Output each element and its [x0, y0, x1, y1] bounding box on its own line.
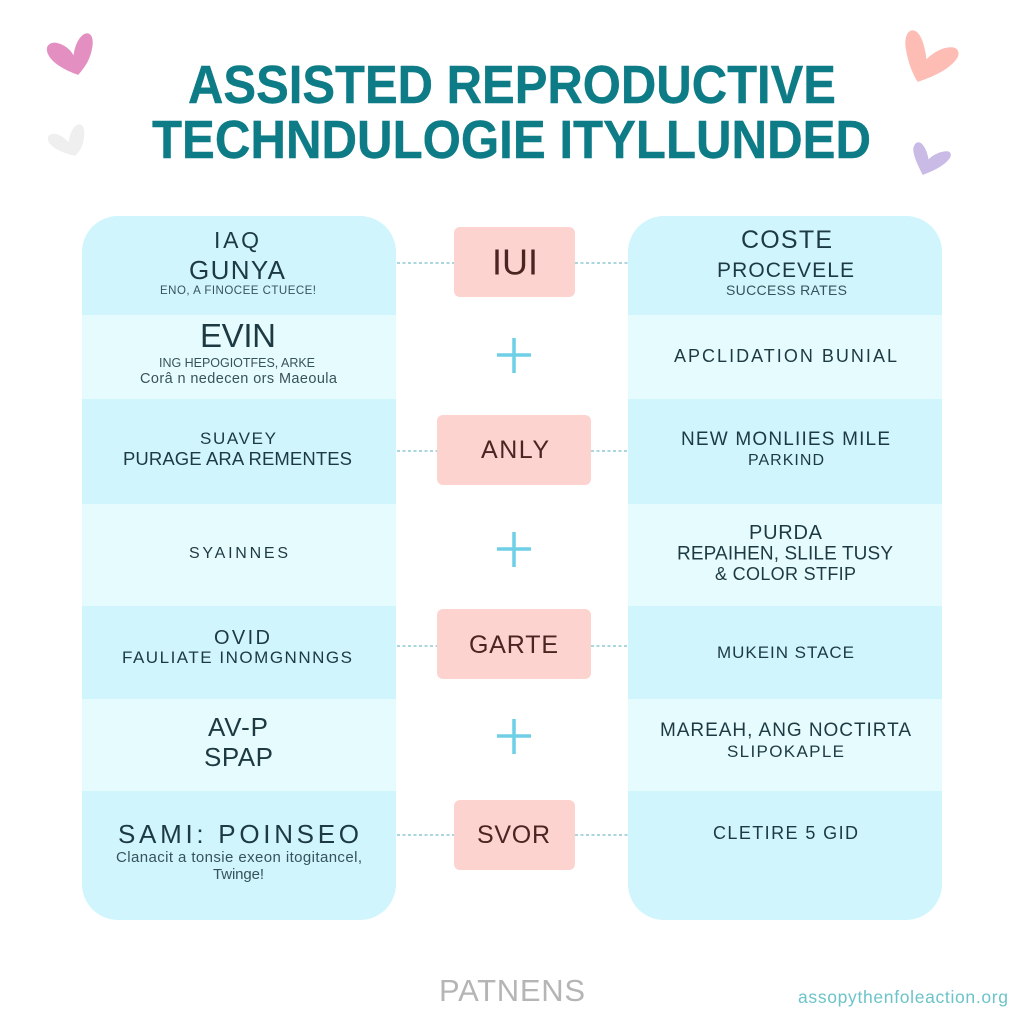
- panel: right column: PARKIND: [748, 452, 824, 469]
- center box: GARTE: GARTE: [469, 631, 558, 659]
- panel: left column: IAQ: [214, 227, 259, 253]
- connectors: [397, 263, 628, 835]
- panel: right column: MUKEIN STACE: [717, 643, 854, 662]
- icon: pink heart: [48, 34, 92, 74]
- title: ASSISTED REPRODUCTIVE: [188, 55, 836, 115]
- panel: left column: PURAGE ARA REMENTES: [123, 448, 352, 469]
- panel: left column: SPAP: [204, 742, 273, 772]
- footer: partners label: PATNENS: [439, 973, 585, 1008]
- center box: IUI: [454, 227, 575, 297]
- panel: left column: Twinge!: [213, 866, 264, 883]
- center box: ANLY: [437, 415, 591, 485]
- panel: right column: SUCCESS RATES: [726, 282, 847, 298]
- icon: salmon heart: [906, 31, 958, 81]
- panel: left column: SYAINNES: [189, 545, 288, 562]
- panel: left column: SAMI: POINSEO: [118, 819, 359, 849]
- panel: right column: NEW MONLIIES MILE: [681, 429, 890, 450]
- center box: GARTE: [437, 609, 591, 679]
- panel: right column: PROCEVELE: [717, 259, 854, 282]
- panel: left column: Clanacit a tonsie exeon itogitancel,: [116, 849, 362, 866]
- panel: left column: ING HEPOGIOTFES, ARKE: [159, 356, 315, 370]
- panel: right column: APCLIDATION BUNIAL: [674, 346, 897, 366]
- title: [152, 55, 871, 170]
- panel: left column: EVIN: [200, 317, 276, 354]
- decorative hearts: [48, 31, 958, 174]
- icon: grey heart: [49, 125, 84, 155]
- panel: left column: FAULIATE INOMGNNNGS: [122, 648, 352, 667]
- panel: left column: AV-P: [208, 712, 268, 742]
- center box: SVOR: [454, 800, 575, 870]
- panel: left column: ENO, A FINOCEE CTUECE!: [160, 285, 316, 297]
- icon: plus 3: [497, 719, 531, 754]
- panel: right column: & COLOR STFIP: [715, 564, 856, 584]
- panel: right column: CLETIRE 5 GID: [713, 823, 858, 843]
- panel: right column: REPAIHEN, SLILE TUSY: [677, 544, 893, 564]
- icon: lavender heart: [914, 143, 950, 174]
- panel: right column: COSTE: [741, 226, 832, 254]
- icon: plus 1: [497, 338, 531, 373]
- panel: left column: [82, 216, 396, 920]
- panel: right column: SLIPOKAPLE: [727, 742, 844, 761]
- title: TECHNDULOGIE ITYLLUNDED: [152, 110, 871, 170]
- footer: website url: assopythenfoleaction.org: [798, 987, 1008, 1007]
- panel: right column: [628, 216, 942, 920]
- center box: SVOR: SVOR: [477, 821, 550, 849]
- panel: right column: MAREAH, ANG NOCTIRTA: [660, 720, 911, 741]
- panel: right column: PURDA: [749, 522, 823, 544]
- center box: IUI: IUI: [492, 242, 538, 282]
- panel: left column: GUNYA: [189, 255, 286, 285]
- center box: ANLY: ANLY: [481, 436, 549, 464]
- panel: left column: SUAVEY: [200, 429, 276, 448]
- panel: left column: Corâ n nedecen ors Maeoula: [140, 371, 338, 387]
- icon: plus 2: [497, 532, 531, 567]
- panel: left column: OVID: [214, 627, 270, 649]
